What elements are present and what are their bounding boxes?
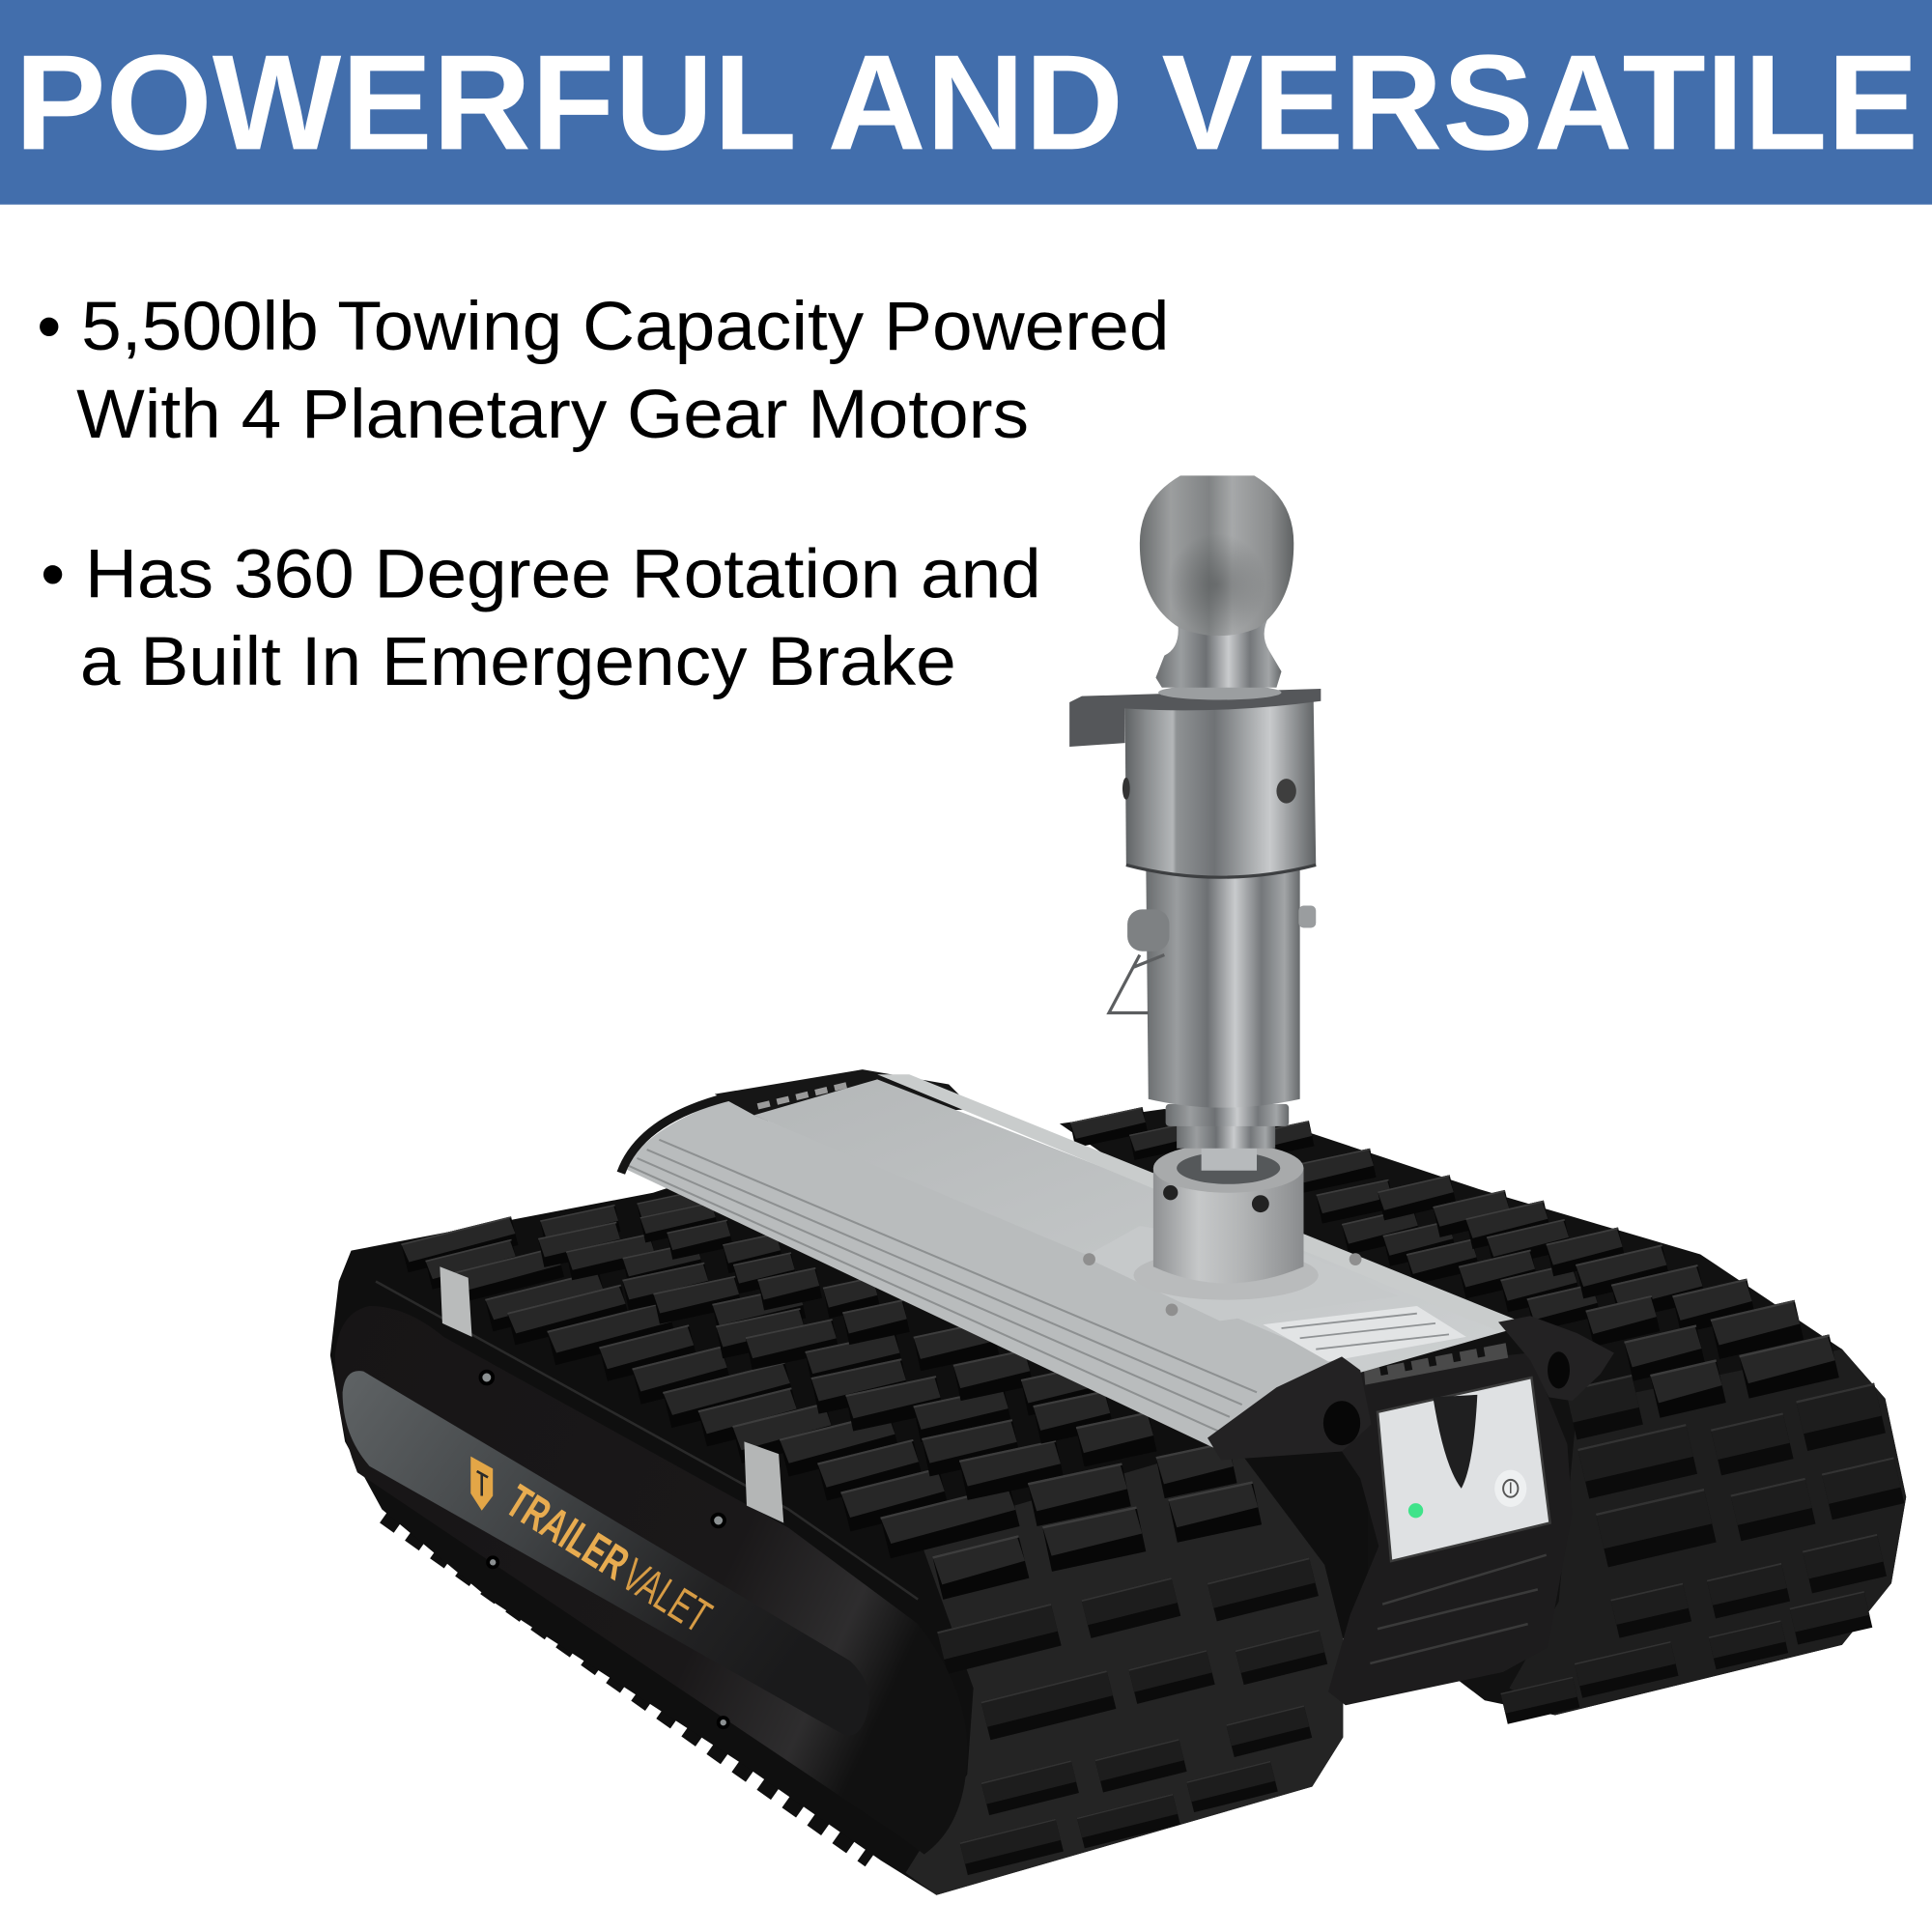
brand logo: TRAILER [497, 1475, 638, 1590]
rail [877, 1074, 1528, 1331]
bullet 2: • [41, 536, 65, 613]
shield icon [470, 1457, 493, 1511]
clip 2 [744, 1441, 783, 1523]
vent slots [1364, 1343, 1508, 1385]
bullet 1 [37, 288, 1169, 453]
front tread lugs [937, 1557, 1327, 1875]
display panel [1378, 1378, 1550, 1561]
tow stem [1069, 475, 1321, 1149]
brand logo [470, 1457, 720, 1643]
header banner [0, 0, 1932, 205]
bullet 2: a Built In Emergency Brake [80, 623, 956, 700]
right end cap [1498, 1316, 1614, 1401]
pin right [1298, 906, 1316, 927]
pin left [1127, 909, 1169, 952]
status led [1408, 1503, 1423, 1518]
ribs [1370, 1555, 1547, 1663]
washer [1158, 685, 1282, 699]
lower cylinder [1146, 856, 1300, 1108]
product: tracked robot dolly [330, 475, 1906, 1895]
bullet 2 [41, 536, 1041, 700]
clip 1 [440, 1266, 472, 1337]
hitch ball [1140, 475, 1293, 636]
grey inset stripe [343, 1371, 869, 1736]
hitch pedestal [1133, 1144, 1319, 1300]
brand logo: VALET [612, 1549, 720, 1643]
bottom tread teeth [392, 1506, 877, 1850]
top tread lugs [401, 1189, 1262, 1600]
plate top [754, 1079, 1516, 1374]
left track [330, 1177, 1368, 1895]
bullet 1: With 4 Planetary Gear Motors [76, 376, 1029, 453]
hole [1276, 779, 1296, 804]
aluminium top plate [621, 1069, 1614, 1460]
black back vent [715, 1069, 974, 1122]
hitch ball neck [1155, 616, 1282, 688]
hook bracket [1069, 689, 1321, 747]
right track [1060, 1107, 1906, 1724]
side panel [335, 1306, 967, 1855]
bullet 2: Has 360 Degree Rotation and [85, 536, 1041, 613]
lock wire [1109, 955, 1164, 1012]
upper cylinder [1125, 697, 1316, 877]
mounting square [1084, 1226, 1399, 1321]
bullet 1: • [37, 288, 61, 365]
upper frame groove [376, 1282, 918, 1600]
title: POWERFUL AND VERSATILE [14, 26, 1918, 178]
striped front face [623, 1100, 1355, 1448]
left end cap [1208, 1356, 1372, 1460]
notch [1433, 1395, 1477, 1489]
label sticker [1263, 1306, 1466, 1361]
screws [480, 1372, 493, 1383]
bullet 1: 5,500lb Towing Capacity Powered [81, 288, 1169, 365]
lower collars [1177, 1123, 1275, 1149]
black end cap [621, 1096, 729, 1173]
power button [1494, 1470, 1526, 1507]
front control housing [1287, 1343, 1573, 1705]
